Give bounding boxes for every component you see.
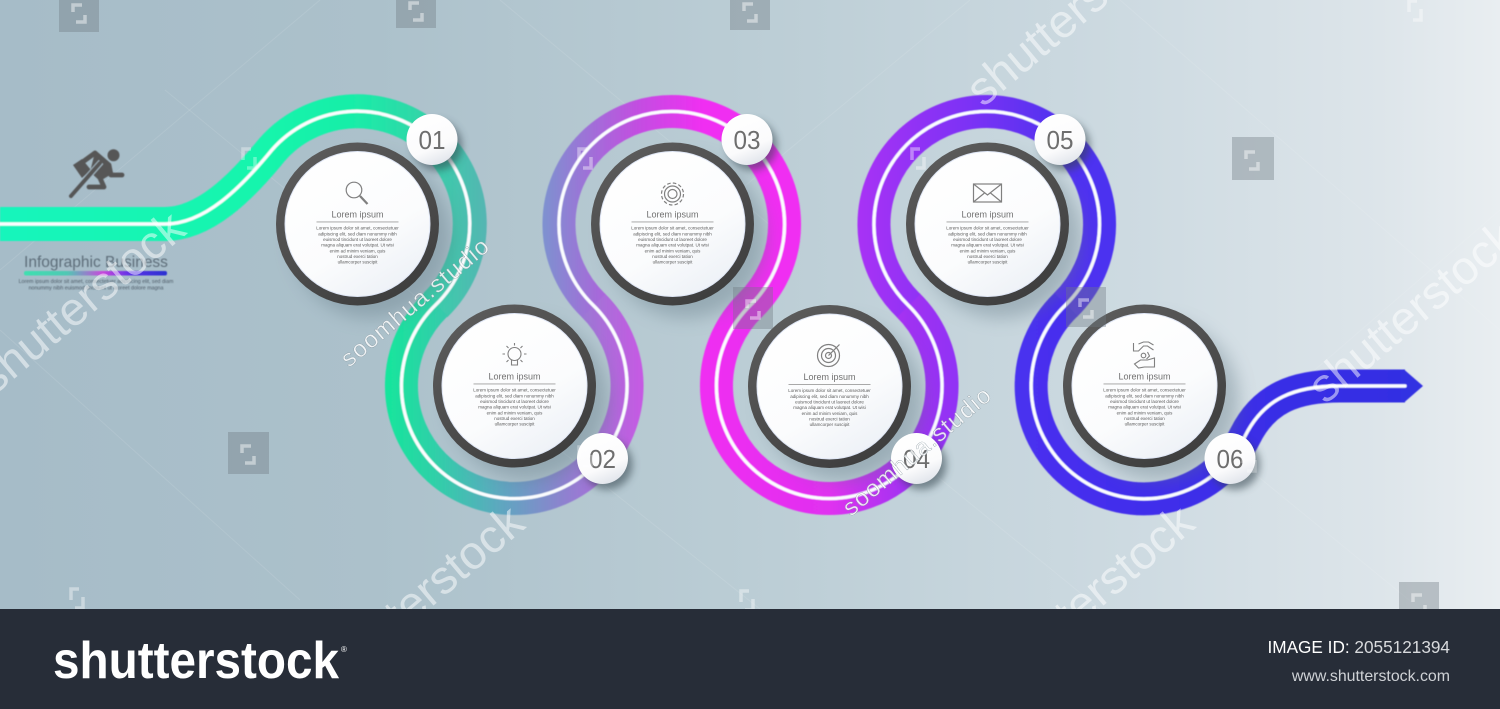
body text: nostrud exerci tation [337,254,378,259]
badge: 01: 01 [418,125,446,155]
website: www.shutterstock.com [1291,668,1450,685]
watermark: shutterstock bottom left: shutterstock [305,494,534,698]
body text: adipiscing elit, sed diam nonummy nibh [1105,393,1184,398]
body text: euismod tincidunt ut laoreet dolore [795,400,864,404]
body text: ullamcorper suscipit [653,260,693,265]
body text: Lorem ipsum dolor sit amet, consectetuer [946,226,1029,230]
body text: nostrud exerci tation [1124,416,1165,421]
icon: magnifier [346,182,368,204]
body text: Lorem ipsum dolor sit amet, consectetuer [788,388,871,393]
body text: magna aliquam erat volutpat. Ut wisi [636,243,709,248]
body text: enim ad minim veniam, quis [960,248,1016,253]
body text: nostrud exerci tation [967,254,1008,259]
body text: adipiscing elit, sed diam nonummy nibh [790,394,869,399]
road segment: step 04 [716,304,942,499]
winding road [0,111,1423,499]
icon: envelope [974,184,1002,202]
arrow head [1404,370,1423,402]
body text: ullamcorper suscipit [1125,422,1165,427]
footer bar: ® [341,645,347,654]
road segment: step 03 [559,111,785,306]
runner icon [71,149,122,196]
road centre line [0,111,1405,499]
body text: adipiscing elit, sed diam nonummy nibh [633,231,712,236]
heading: Lorem ipsum [488,372,541,382]
body text: euismod tincidunt ut laoreet dolore [323,237,392,242]
body text: ullamcorper suscipit [810,422,850,427]
icon: gear [662,183,684,205]
heading: Lorem ipsum [331,210,384,220]
body text: Lorem ipsum dolor sit amet, consectetuer [316,226,399,230]
body text: adipiscing elit, sed diam nonummy nibh [948,231,1027,236]
body text: magna aliquam erat volutpat. Ut wisi [321,243,394,248]
body text: magna aliquam erat volutpat. Ut wisi [478,405,551,410]
icon: hands with money [1134,342,1154,368]
panel: step 05 [906,142,1082,318]
left heading block [19,254,174,292]
body text: adipiscing elit, sed diam nonummy nibh [475,393,554,398]
heading: Lorem ipsum [646,210,699,220]
shutterstock logo: shutterstock [53,632,339,690]
gradient rule [24,271,167,276]
heading: Infographic Business: Infographic Business [24,254,168,271]
footer bar [0,609,1500,709]
body text: nostrud exerci tation [809,416,850,422]
body text: nostrud exerci tation [494,416,535,421]
body text: magna aliquam erat volutpat. Ut wisi [1108,405,1181,410]
badge: 05: 05 [1046,125,1074,155]
body text: enim ad minim veniam, quis [802,411,858,416]
road segment: step 06 with arrow end [1031,304,1405,499]
body text: ullamcorper suscipit [968,260,1008,265]
watermark: shutterstock bottom right: shutterstock [975,494,1204,698]
badge: 01 [406,114,462,170]
body text: ullamcorper suscipit [495,422,535,427]
body text: euismod tincidunt ut laoreet dolore [1110,399,1179,404]
body text: Lorem ipsum dolor sit amet, consectetuer [1103,388,1186,392]
body text: enim ad minim veniam, quis [645,248,701,253]
body text: Lorem ipsum dolor sit amet, consectetuer [631,226,714,230]
body text: euismod tincidunt ut laoreet dolore [480,399,549,404]
road segment: step 01 [0,111,470,305]
body text: enim ad minim veniam, quis [487,410,543,415]
body text: enim ad minim veniam, quis [1117,410,1173,415]
badge: 04: 04 [903,444,930,474]
intro text: nonummy nibh euismod tincidunt ut laoreet dolore magna [29,286,163,292]
image id: IMAGE ID: 2055121394 [1268,637,1450,657]
badge: 02 [577,433,632,490]
body text: euismod tincidunt ut laoreet dolore [953,237,1022,242]
panel: step 04 [748,305,924,480]
badge: 04 [891,433,946,490]
body text: enim ad minim veniam, quis [330,248,386,253]
body text: magna aliquam erat volutpat. Ut wisi [793,405,866,410]
badge: 05 [1034,114,1090,170]
badge: 06 [1204,433,1260,490]
heading: Lorem ipsum [961,210,1014,220]
watermark: soomhua.studio 1: soomhua.studio [336,233,495,373]
badge: 06: 06 [1216,444,1244,474]
panel: step 03 [591,142,766,318]
badge: 02: 02 [589,444,616,474]
heading: Lorem ipsum [803,372,856,382]
body text: nostrud exerci tation [652,254,693,259]
body text: adipiscing elit, sed diam nonummy nibh [318,231,397,236]
badge: 03 [722,114,777,170]
body text: euismod tincidunt ut laoreet dolore [638,237,707,242]
intro text: Lorem ipsum dolor sit amet, consectetuer adipiscing elit, sed diam [19,279,174,285]
panel: step 06 [1063,304,1238,480]
panel: step 01 [276,142,452,318]
icon: light bulb [502,343,526,365]
body text: Lorem ipsum dolor sit amet, consectetuer [473,388,556,392]
badge: 03: 03 [734,125,760,155]
icon: target [818,344,840,366]
road segment: step 05 [874,111,1100,306]
body text: ullamcorper suscipit [338,260,378,265]
heading: Lorem ipsum [1118,372,1171,382]
road segment: step 02 [401,304,627,499]
panel: step 02 [433,304,608,480]
watermark: soomhua.studio 2: soomhua.studio [838,382,997,522]
body text: magna aliquam erat volutpat. Ut wisi [951,243,1024,248]
